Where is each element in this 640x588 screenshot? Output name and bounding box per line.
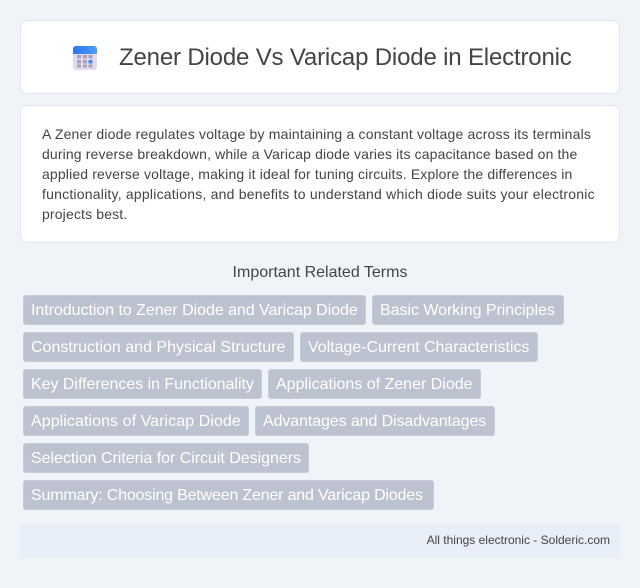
footer bar — [20, 524, 620, 558]
tag: Applications of Varicap Diode — [31, 413, 241, 430]
title: Zener Diode Vs Varicap Diode in Electronic — [119, 44, 572, 71]
intro text panel: A Zener diode regulates voltage by maintaining a constant voltage across its terminals — [42, 126, 591, 142]
intro text panel: projects best. — [42, 206, 127, 222]
tag — [23, 295, 366, 325]
tag: Applications of Zener Diode — [276, 376, 473, 393]
tag — [23, 332, 294, 362]
intro text panel — [20, 105, 620, 243]
section heading: Important Related Terms — [233, 264, 407, 281]
tag — [23, 369, 262, 399]
intro text panel: during reverse breakdown, while a Varicap diode varies its capacitance based on the — [42, 146, 577, 162]
tag list — [23, 295, 564, 510]
tag — [23, 443, 309, 473]
tag: Summary: Choosing Between Zener and Varicap Diodes — [31, 487, 423, 504]
tag — [268, 369, 481, 399]
tag: Selection Criteria for Circuit Designers — [31, 450, 301, 467]
tag — [23, 406, 249, 436]
tag — [255, 406, 495, 436]
tag: Construction and Physical Structure — [31, 339, 285, 356]
intro text panel: applied reverse voltage, making it ideal for tuning circuits. Explore the differences in — [42, 166, 572, 182]
tag — [372, 295, 564, 325]
tag — [300, 332, 538, 362]
footer bar: All things electronic - Solderic.com — [427, 533, 610, 547]
tag: Advantages and Disadvantages — [263, 413, 486, 430]
tag: Introduction to Zener Diode and Varicap Diode — [31, 302, 358, 319]
tag: Basic Working Principles — [380, 302, 555, 319]
intro text panel: functionality, applications, and benefits to understand which diode suits your electronic — [42, 186, 595, 202]
tag: Voltage-Current Characteristics — [308, 339, 529, 356]
tag: Key Differences in Functionality — [31, 376, 254, 393]
header panel — [20, 20, 620, 94]
tag — [23, 480, 434, 510]
icon: calendar grid — [73, 46, 97, 70]
